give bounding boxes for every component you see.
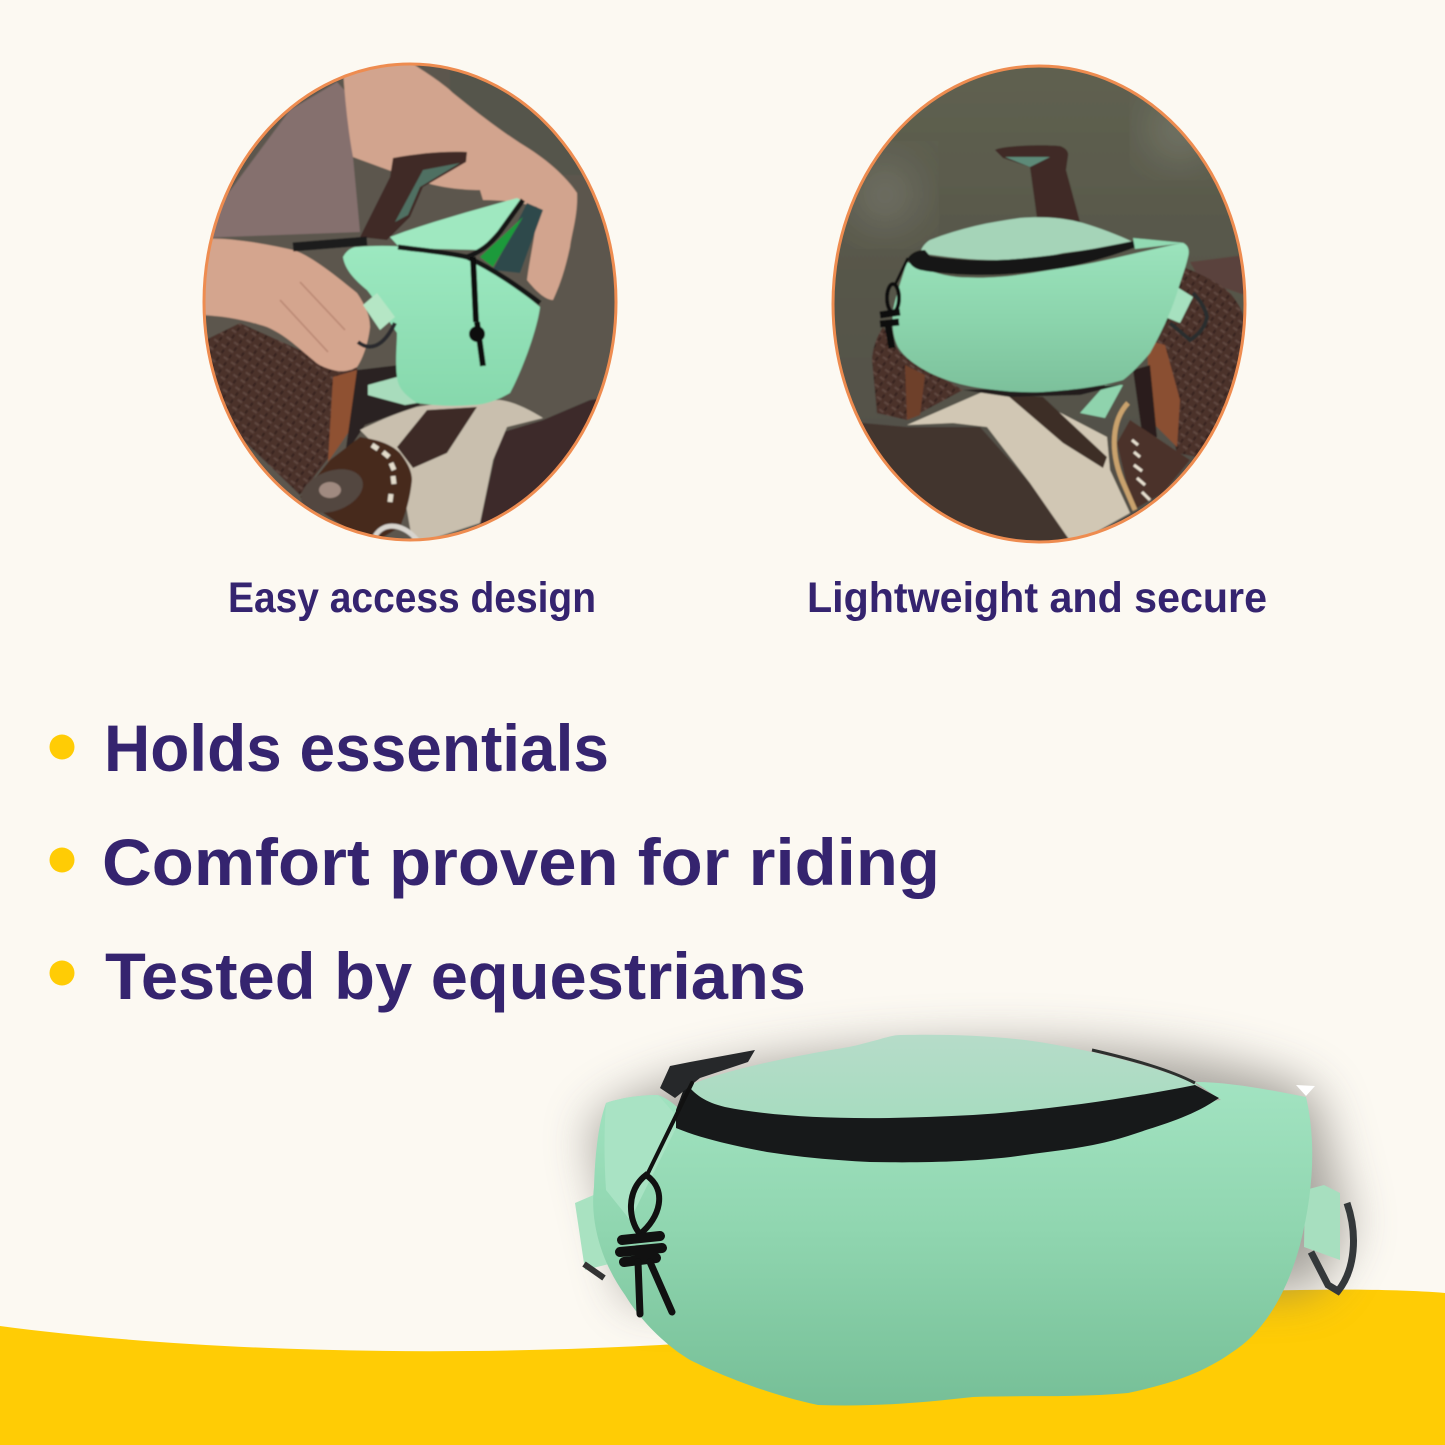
shirt: [214, 82, 360, 238]
zip cord: [880, 258, 908, 348]
green pack top panel: [920, 217, 1133, 260]
pack body: [593, 1082, 1312, 1406]
brown flap with concho: [300, 437, 412, 545]
zip cord: [473, 257, 483, 366]
zip cord: [620, 1083, 692, 1314]
horse: [479, 398, 596, 524]
saddle pad: [907, 390, 1130, 545]
green pack lower pocket: [368, 377, 417, 405]
tooled saddle leather: [208, 324, 358, 495]
caption: lightweight and secure: Lightweight and secure: [807, 574, 1267, 622]
white corner: [1296, 1085, 1315, 1096]
green pack body: [343, 246, 540, 406]
green pack body: [893, 243, 1189, 392]
strap and buckle: [1165, 287, 1193, 323]
left strap: [575, 1194, 617, 1270]
bullet: holds essentials: Holds essentials: [104, 711, 609, 785]
saddle pad: [360, 400, 543, 545]
bullet: comfort proven for riding: Comfort proven for riding: [102, 825, 940, 899]
pack shadow: [590, 1045, 1350, 1300]
zipper: [908, 241, 1136, 275]
saddle seat: [1007, 395, 1107, 468]
product photo: mint belt pack: [575, 1035, 1353, 1406]
saddle horn: [995, 145, 1080, 222]
caption: easy access design: Easy access design: [228, 574, 596, 622]
cantle: [1190, 255, 1245, 295]
upper arm and right hand: [343, 62, 577, 300]
black clip: [293, 241, 367, 247]
green strap under pack: [1080, 385, 1123, 418]
strap and buckle: [363, 293, 395, 330]
top panel: [684, 1035, 1219, 1125]
pale side panel: [604, 1095, 680, 1220]
far zipper teeth: [1092, 1050, 1195, 1083]
green pack flap: [390, 198, 525, 250]
tooled saddle left: [872, 327, 963, 420]
buckle: [1311, 1203, 1353, 1291]
left hand: [195, 238, 370, 371]
bullet list: [50, 711, 940, 1013]
brown flap right: [1117, 420, 1190, 510]
saddle horn: [360, 152, 467, 240]
phone: [493, 203, 543, 273]
horse: [862, 422, 1068, 540]
zipper: [676, 1083, 1219, 1162]
saddle seat: [397, 407, 477, 468]
right strap: [1304, 1185, 1340, 1260]
yellow wave: [0, 1290, 1445, 1445]
photo: easy access design: [195, 55, 625, 550]
tooled saddle right: [1150, 267, 1245, 457]
photo: lightweight and secure: [825, 55, 1255, 550]
bullet: tested by equestrians: Tested by equestrians: [105, 939, 806, 1013]
zipper pull: [660, 1050, 755, 1098]
zippers: [398, 200, 540, 303]
